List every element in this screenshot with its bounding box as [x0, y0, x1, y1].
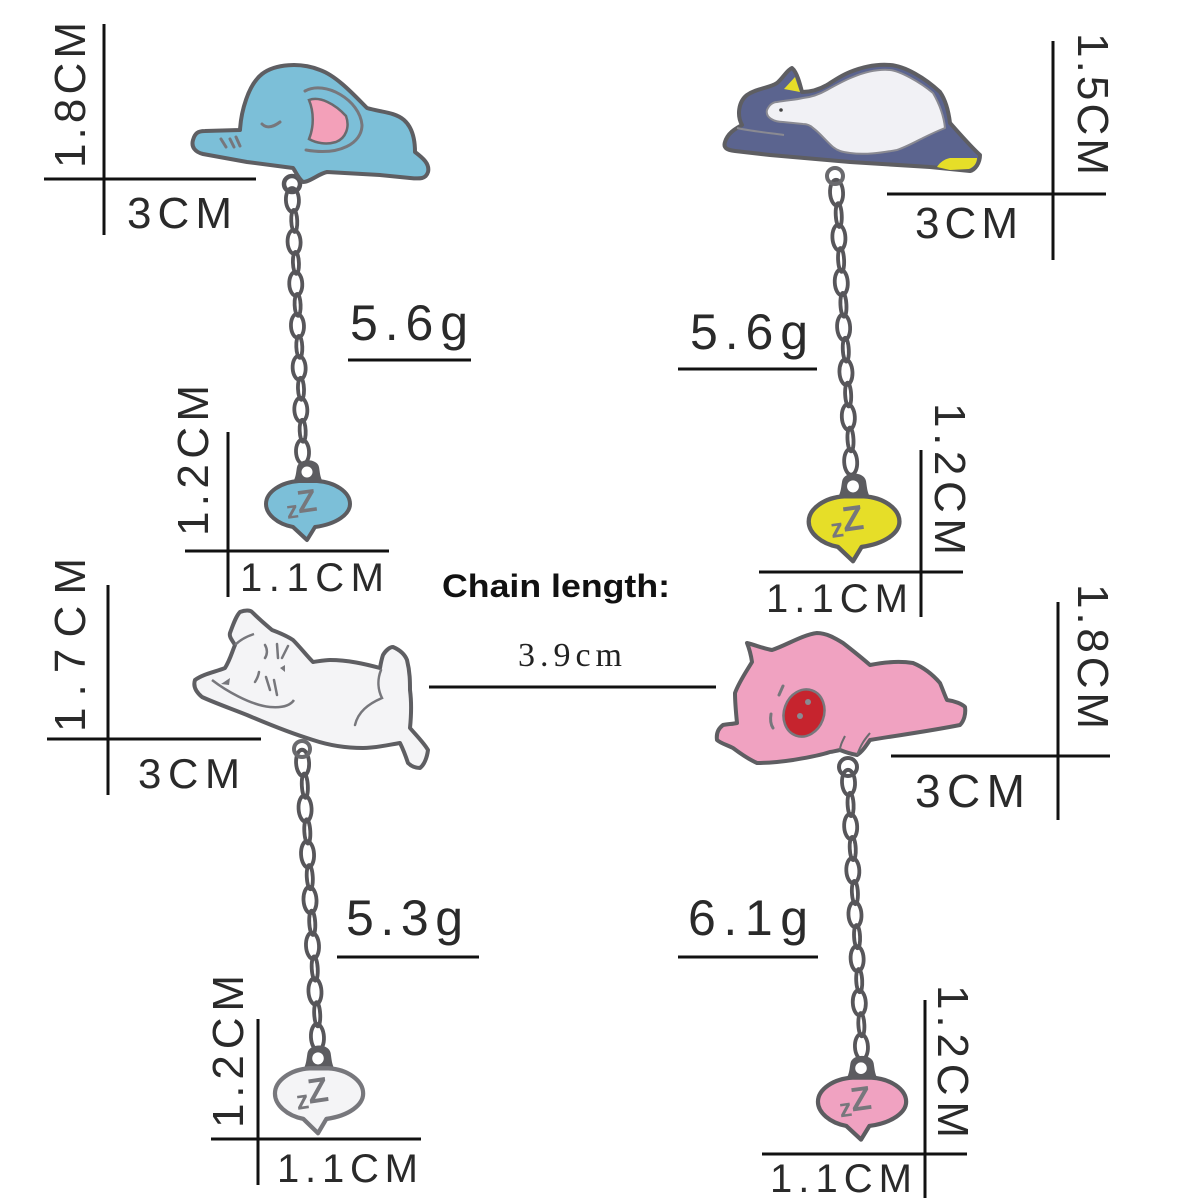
dimension: 3CM width: 3CM: [127, 189, 232, 238]
dimension: charm height: 1.2CM: [928, 985, 977, 1138]
chain: elephant: [285, 188, 309, 464]
icon: penguin charm: [809, 473, 899, 561]
panel: chain length note: [429, 568, 716, 687]
heading: chain length: Chain length:: [442, 568, 670, 604]
panel: penguin pin: [678, 33, 1117, 621]
panel: cat pin: [46, 558, 479, 1191]
chain: pig: [841, 770, 869, 1060]
icon: cat charm: [275, 1045, 363, 1133]
icon: elephant enamel body: [192, 65, 428, 182]
panel: elephant pin: [44, 22, 471, 600]
icon: cat enamel body: [194, 610, 428, 768]
icon: pig charm: [818, 1056, 906, 1140]
panel: pig pin: [678, 584, 1117, 1200]
icon: elephant charm: z: [284, 496, 300, 525]
dimension: 3CM width: 3CM: [915, 765, 1025, 817]
dimension: charm width: 1.1CM: [277, 1147, 418, 1191]
icon: penguin loop ring: [827, 168, 843, 184]
icon: elephant loop ring: [284, 176, 300, 192]
icon: pig charm: z: [837, 1094, 854, 1123]
weight label: 6.1g: [688, 890, 808, 946]
dimension: charm height: 1.2CM: [925, 403, 974, 555]
chain: cat: [295, 749, 325, 1051]
icon: pig enamel body: [717, 633, 965, 763]
icon: cat charm: z: [294, 1086, 311, 1116]
dimension: 1.8CM height: 1.8CM: [1068, 584, 1117, 729]
dimension: 1.5CM height: 1.5CM: [1068, 33, 1117, 175]
dimension: 3CM width: 3CM: [138, 750, 240, 797]
icon: penguin charm: Z: [840, 498, 866, 540]
weight label: 5.6g: [690, 304, 808, 360]
icon: pig loop ring: [839, 758, 857, 776]
icon: penguin enamel body: [724, 65, 980, 171]
weight label: 5.6g: [350, 295, 468, 351]
dimension: 1.7CM height: 1.7CM: [46, 558, 95, 732]
icon: elephant charm: [266, 460, 350, 540]
dimension: charm height: 1.2CM: [204, 975, 253, 1128]
icon: elephant charm: Z: [295, 482, 319, 520]
dimension: charm width: 1.1CM: [766, 577, 908, 621]
chain: penguin: [829, 180, 858, 475]
weight label: 5.3g: [346, 890, 463, 946]
icon: cat charm: Z: [305, 1070, 331, 1112]
dimension: charm width: 1.1CM: [770, 1157, 912, 1200]
dimension: 3CM width: 3CM: [915, 199, 1018, 248]
icon: cat loop ring: [294, 741, 310, 757]
dimension: charm height: 1.2CM: [169, 385, 218, 536]
text: 3.9cm: 3.9cm: [518, 637, 622, 674]
icon: pig charm: Z: [848, 1080, 874, 1119]
dimension: charm width: 1.1CM: [240, 556, 384, 600]
dimension: 1.8CM height: 1.8CM: [46, 22, 95, 168]
icon: penguin charm: z: [828, 512, 845, 544]
